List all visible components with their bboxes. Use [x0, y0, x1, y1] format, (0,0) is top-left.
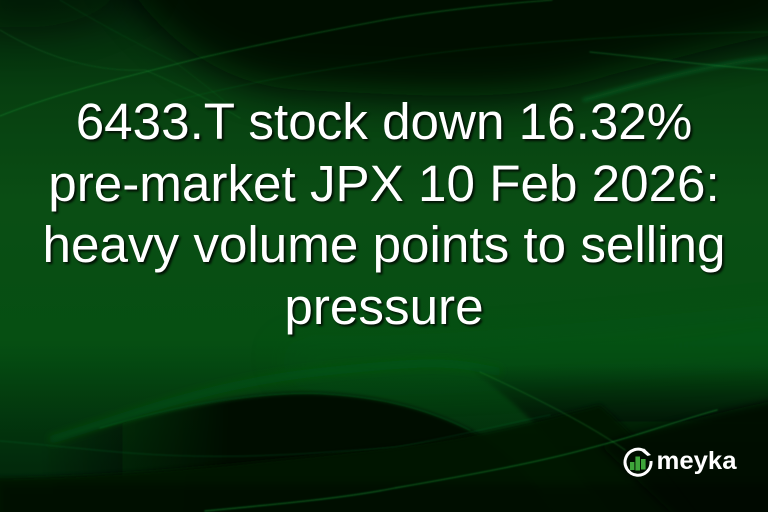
- bottom right dark corner: [600, 395, 768, 512]
- title: pressure: [284, 278, 484, 334]
- title: pre-market JPX 10 Feb 2026:: [48, 154, 720, 212]
- icon: ring with bars: [625, 448, 651, 475]
- title: heavy volume points to selling: [43, 216, 725, 273]
- title: [43, 93, 726, 338]
- right lower fade: [470, 350, 768, 512]
- bottom dark hump: [40, 393, 560, 512]
- wordmark: meyka: [656, 447, 738, 475]
- top dark masses: [110, 0, 768, 96]
- logo: meyka: [624, 447, 738, 477]
- title: 6433.T stock down 16.32%: [76, 93, 692, 150]
- bottom dark band: [0, 405, 700, 512]
- lower left shading: [0, 340, 768, 512]
